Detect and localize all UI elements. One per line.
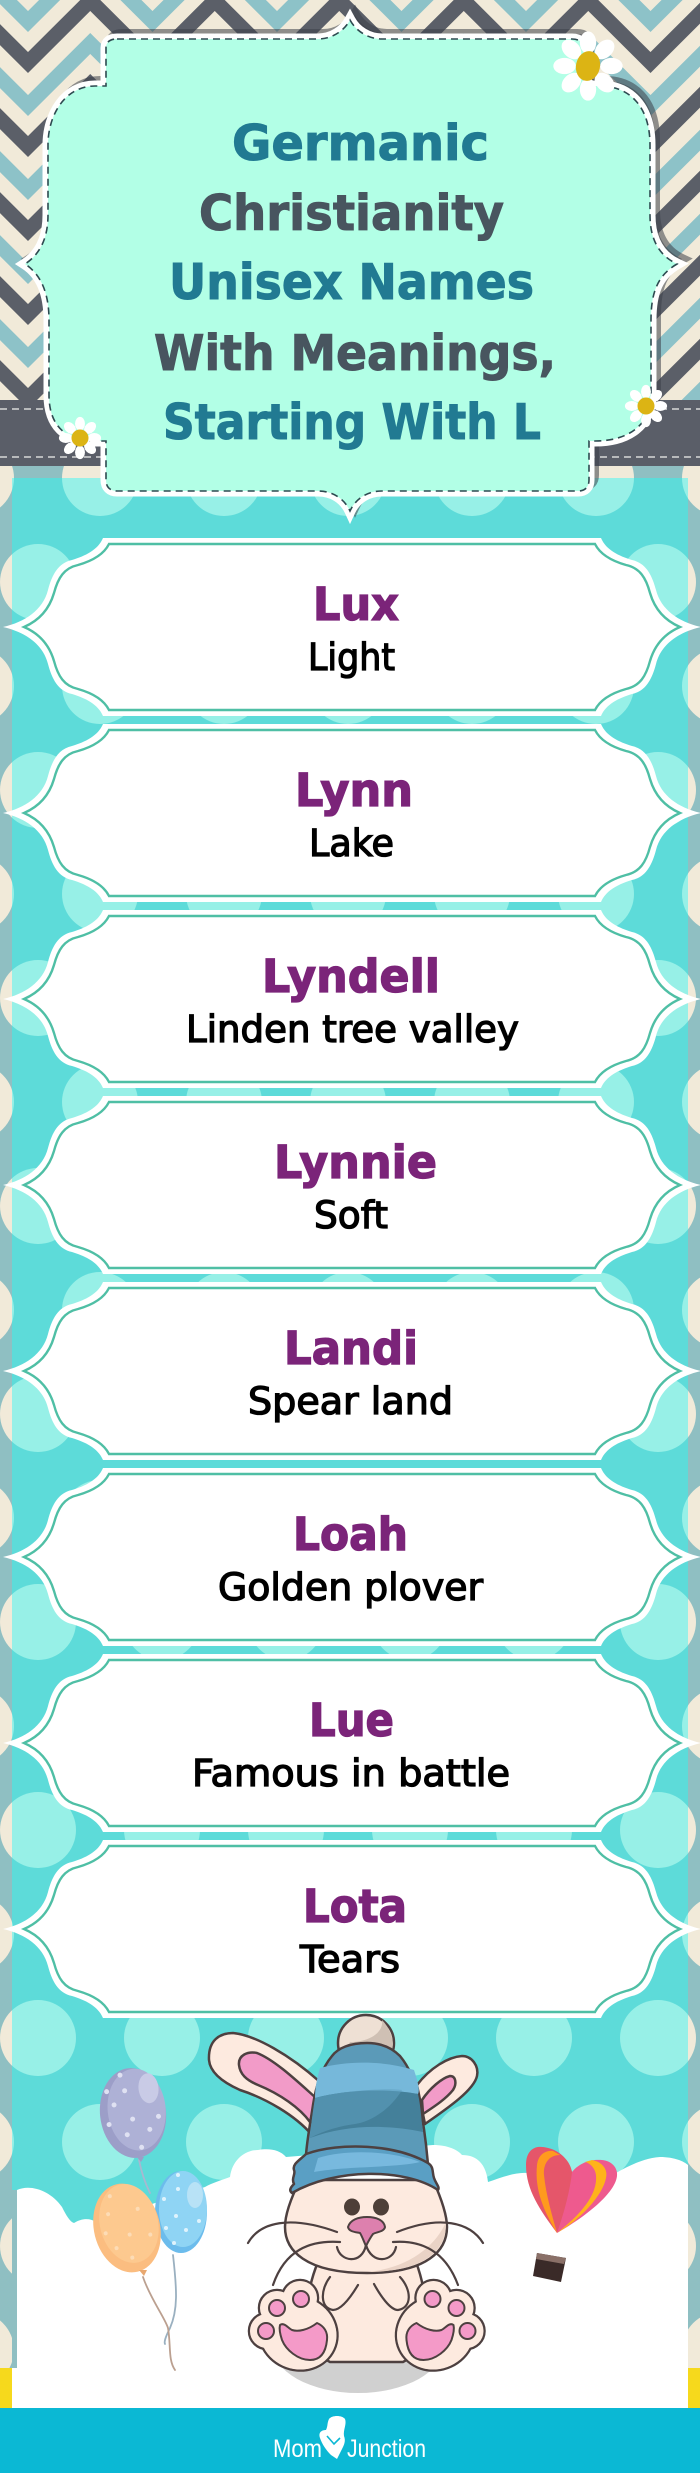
title: Christianity	[199, 185, 504, 242]
card: Lota: Lota	[303, 1880, 407, 1933]
heart hot air balloon	[526, 2147, 617, 2282]
card: Lyndell: Linden tree valley	[186, 1008, 519, 1051]
title plate	[25, 15, 682, 511]
balloons	[84, 2065, 207, 2370]
striped hat	[306, 2043, 428, 2165]
right foot	[384, 2280, 487, 2383]
card: Lux: Light	[308, 636, 395, 679]
hat pom pom	[338, 2015, 394, 2071]
head	[285, 2180, 447, 2273]
card: Landi: Spear land	[248, 1380, 453, 1423]
MomJunction logo: Mom	[273, 2435, 322, 2463]
whiskers	[248, 2222, 483, 2285]
grey stitched band	[0, 400, 700, 466]
left foot	[246, 2280, 350, 2383]
eyes	[344, 2198, 389, 2216]
title: Starting With L	[163, 394, 541, 451]
body	[307, 2262, 426, 2362]
flower right	[625, 385, 667, 427]
card: Lue	[3, 1654, 700, 1832]
card: Loah: Loah	[293, 1508, 408, 1561]
card: Lota: Tears	[299, 1938, 400, 1981]
heart	[526, 2147, 573, 2233]
MomJunction logo: Junction	[347, 2435, 426, 2463]
logo icon	[319, 2416, 346, 2459]
ground shadow	[272, 2297, 444, 2393]
bunny wearing striped hat	[209, 2015, 487, 2393]
card: Loah: Golden plover	[218, 1566, 484, 1609]
title	[154, 115, 556, 451]
card: Lynn: Lynn	[295, 764, 413, 817]
right ear	[417, 2056, 477, 2124]
mouth	[337, 2245, 396, 2259]
basket	[533, 2253, 566, 2282]
MomJunction logo	[273, 2416, 426, 2463]
card: Lota	[3, 1840, 700, 2018]
orange balloon	[84, 2176, 170, 2280]
title: With Meanings,	[154, 325, 556, 382]
card: Lynnie: Lynnie	[274, 1136, 437, 1189]
card: Lynn	[3, 724, 700, 902]
arms	[323, 2277, 358, 2310]
card: Lynn: Lake	[309, 822, 394, 865]
title: Unisex Names	[169, 254, 534, 311]
chevron header background	[0, 0, 700, 442]
teal polka dot panel	[12, 478, 688, 2408]
card: Lue: Lue	[309, 1694, 394, 1747]
white cloud	[17, 2145, 688, 2408]
card: Lux: Lux	[313, 578, 399, 631]
card: Landi: Landi	[284, 1322, 418, 1375]
yellow corner tabs	[0, 2368, 700, 2408]
card: Lyndell: Lyndell	[262, 950, 440, 1003]
footer bar	[0, 2408, 700, 2473]
hat brim	[290, 2147, 439, 2193]
nose	[348, 2217, 385, 2246]
left ear	[209, 2033, 320, 2135]
card: Lynnie	[3, 1096, 700, 1274]
purple balloon	[95, 2065, 171, 2161]
card: Landi	[3, 1282, 700, 1460]
balloon strings	[139, 2160, 176, 2370]
blue balloon	[155, 2171, 207, 2253]
card: Lue: Famous in battle	[192, 1752, 510, 1795]
card: Loah	[3, 1468, 700, 1646]
flower bottom left	[59, 417, 101, 459]
card: Lyndell	[3, 910, 700, 1088]
flower top right	[553, 31, 623, 101]
card: Lynnie: Soft	[314, 1194, 388, 1237]
side strip beside cloud	[12, 2190, 17, 2408]
title: Germanic	[232, 115, 489, 172]
card: Lux	[3, 538, 700, 716]
